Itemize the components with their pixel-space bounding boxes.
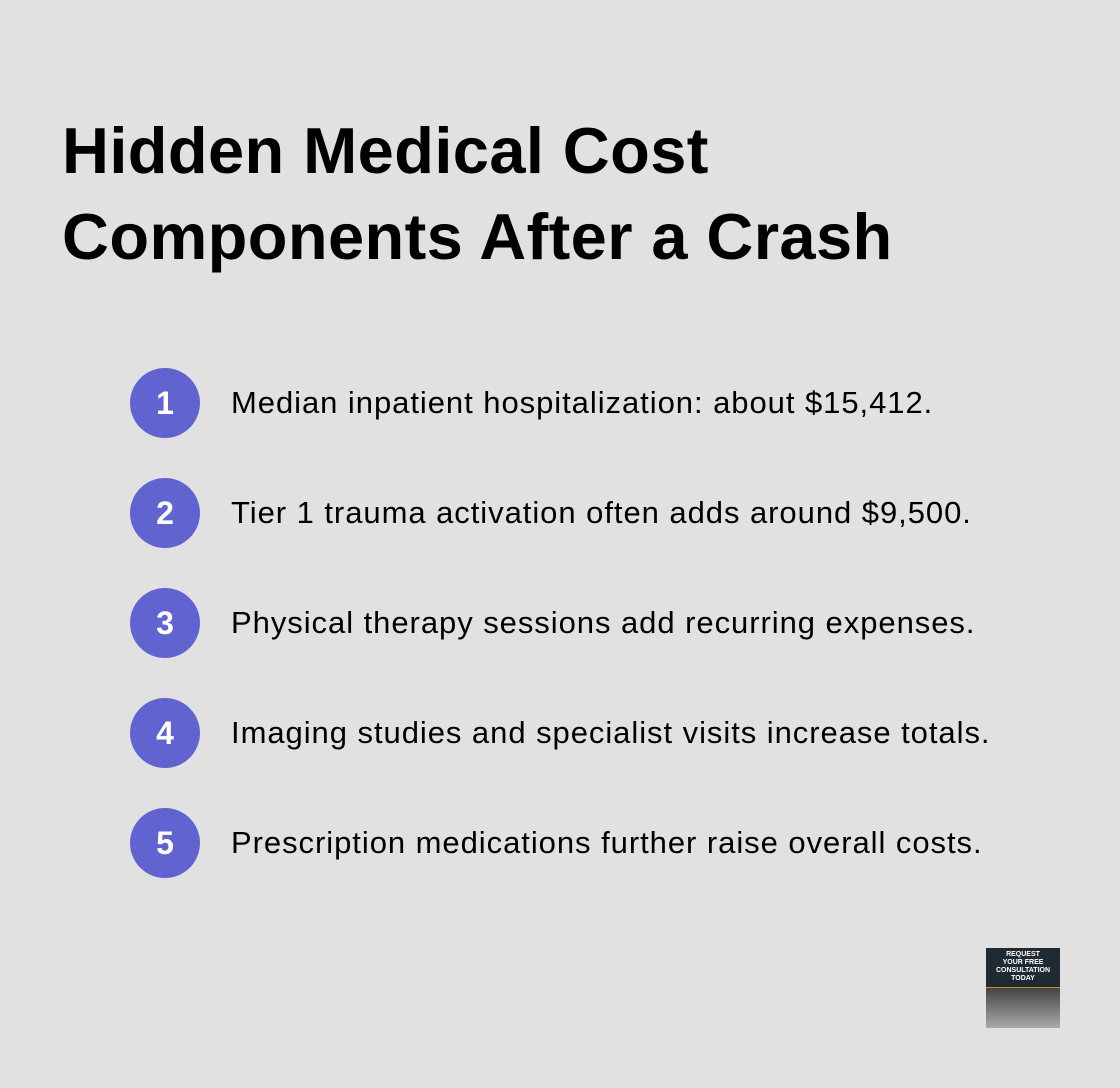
item 4: Imaging studies and specialist visits increase totals.	[231, 715, 990, 750]
logo: consultation badge: CONSULTATION	[996, 967, 1050, 974]
logo: consultation badge: YOUR FREE	[1003, 959, 1043, 966]
logo: consultation badge: TODAY	[1011, 975, 1035, 982]
item 3: 3	[156, 605, 174, 641]
item 3	[130, 588, 975, 658]
item 5	[130, 808, 983, 878]
item 2	[130, 478, 972, 548]
item 1: Median inpatient hospitalization: about $15,412.	[231, 385, 933, 420]
logo: consultation badge	[986, 948, 1060, 1028]
item 2: 2	[156, 495, 174, 531]
item 4: 4	[156, 715, 174, 751]
logo: consultation badge: REQUEST	[1006, 951, 1040, 958]
item 5: Prescription medications further raise overall costs.	[231, 825, 983, 860]
item 5: 5	[156, 825, 174, 861]
item 2: Tier 1 trauma activation often adds around $9,500.	[231, 495, 972, 530]
title: Hidden Medical Cost	[62, 114, 709, 187]
item 1	[130, 368, 933, 438]
title: Components After a Crash	[62, 200, 893, 273]
item 4	[130, 698, 990, 768]
title	[62, 114, 893, 273]
item 1: 1	[156, 385, 174, 421]
item 3: Physical therapy sessions add recurring expenses.	[231, 605, 975, 640]
